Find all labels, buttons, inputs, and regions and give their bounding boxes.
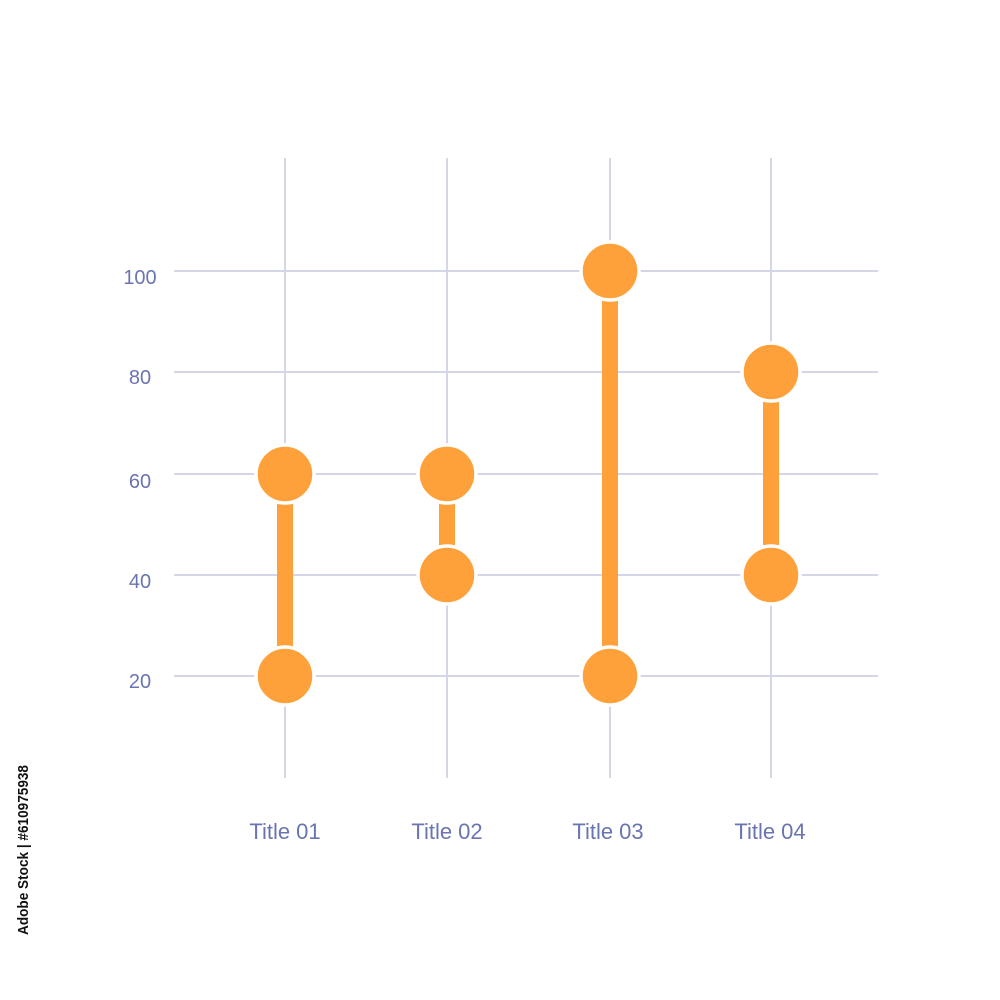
x-axis labels	[249, 819, 806, 844]
x-axis labels: Title 01	[249, 819, 321, 844]
markers	[256, 242, 800, 705]
y-axis labels: 40	[129, 571, 151, 593]
x-axis labels: Title 02	[411, 819, 483, 844]
x-axis labels: Title 04	[734, 819, 806, 844]
watermark id: Adobe Stock | #610975938	[15, 765, 32, 935]
y-axis labels: 100	[123, 267, 157, 289]
y-axis labels: 60	[129, 471, 151, 493]
x-axis labels: Title 03	[572, 819, 644, 844]
y-axis labels: 80	[129, 367, 151, 389]
y-axis labels: 20	[129, 671, 151, 693]
bars	[277, 271, 779, 676]
y-axis labels	[123, 267, 157, 693]
